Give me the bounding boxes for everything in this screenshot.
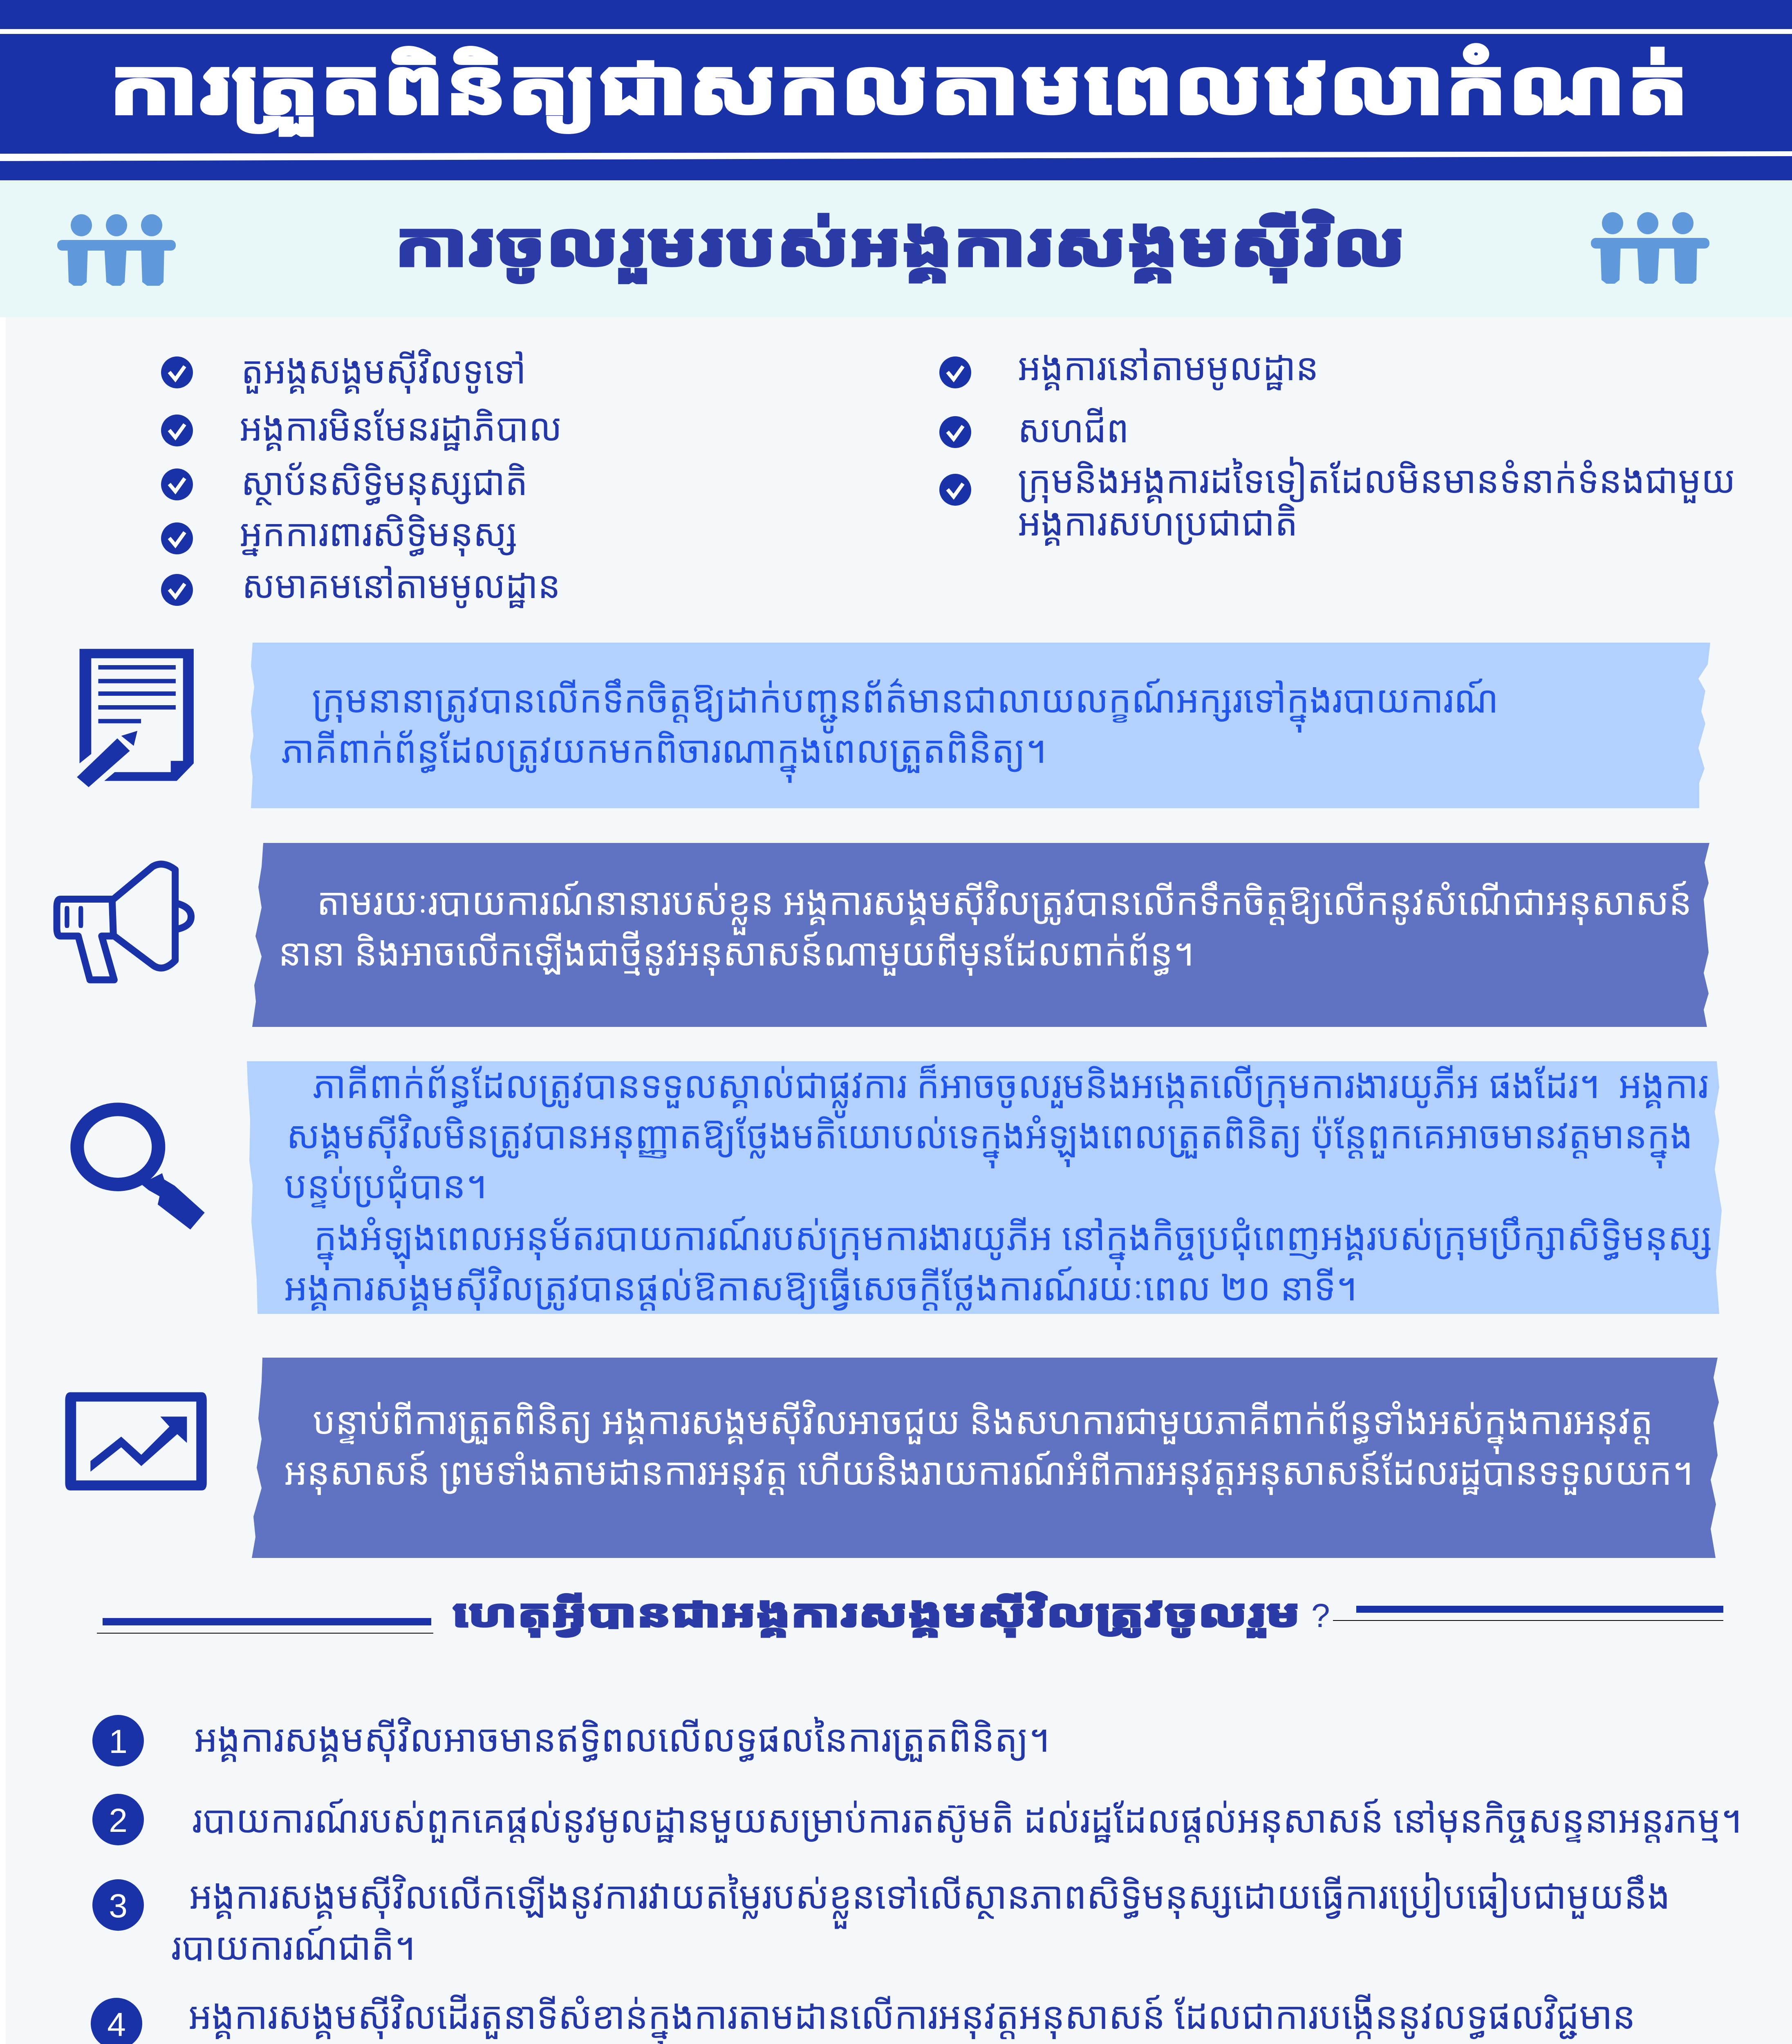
- text: ភាគីពាក់ព័ន្ធដែលត្រូវយកមកពិចារណាក្នុងពេលត្រួតពិនិត្យ។: [281, 723, 1046, 782]
- item: សមាគមនៅតាមមូលដ្ឋាន: [242, 558, 560, 609]
- item: [939, 402, 1129, 453]
- item: តួអង្គសង្គមស៊ីវិលទូទៅ: [241, 343, 526, 394]
- panel: after review: [252, 1358, 1719, 1558]
- item: សហជីព: [1018, 402, 1129, 453]
- item: ក្រុមនិងអង្គការដទៃទៀតដែលមិនមានទំនាក់ទំនងជាមួយ: [1018, 453, 1736, 504]
- subtitle band: [0, 180, 1792, 317]
- text: បន្ទប់ប្រជុំបាន។: [284, 1158, 487, 1209]
- text: សង្គមស៊ីវិលមិនត្រូវបានអនុញ្ញាតឱ្យថ្លែងមតិយោបល់ទេក្នុងអំឡុងពេលត្រួតពិនិត្យ ប៉ុន្តែពួកគេអាចមានវត្តមានក្នុង: [287, 1108, 1693, 1168]
- heading: why participate: ហេតុអ្វីបានជាអង្គការសង្គមស៊ីវិលត្រូវចូលរួម: [452, 1587, 1300, 1638]
- reason 4: 4: [107, 2006, 126, 2043]
- panel: written submissions: [250, 643, 1710, 808]
- text: នានា និងអាចលើកឡើងជាថ្មីនូវអនុសាសន៍ណាមួយពីមុនដែលពាក់ព័ន្ធ។: [278, 926, 1194, 977]
- reason 2: របាយការណ៍របស់ពួកគេផ្តល់នូវមូលដ្ឋានមួយសម្រាប់ការតស៊ូមតិ ដល់រដ្ឋដែលផ្តល់អនុសាសន៍ នៅមុនកិច្ចសន្ទនាអន្តរកម្ម។: [192, 1793, 1742, 1844]
- icon: people left: [57, 214, 176, 286]
- header banner: [0, 0, 1792, 180]
- panel: recommendations: [252, 843, 1709, 1027]
- icon: document with pencil: [77, 649, 194, 787]
- text: អនុសាសន៍ ព្រមទាំងតាមដានការអនុវត្ត ហើយនិងរាយការណ៍អំពីការអនុវត្តអនុសាសន៍ដែលរដ្ឋបានទទួលយក។: [284, 1445, 1693, 1496]
- reason 2: 2: [109, 1802, 128, 1839]
- subtitle: ការចូលរួមរបស់អង្គការសង្គមស៊ីវិល: [394, 202, 1406, 284]
- reason 3: របាយការណ៍ជាតិ។: [171, 1920, 415, 1971]
- item: អង្គការសហប្រជាជាតិ: [1018, 495, 1298, 547]
- reason 1: អង្គការសង្គមស៊ីវិលអាចមានឥទ្ធិពលលើលទ្ធផលនៃការត្រួតពិនិត្យ។: [194, 1712, 1050, 1763]
- icon: megaphone: [57, 864, 191, 980]
- checklist left: [161, 343, 562, 609]
- checklist right: [939, 340, 1736, 547]
- item: ស្ថាប័នសិទ្ធិមនុស្សជាតិ: [241, 455, 528, 506]
- panel: observing working group: [247, 1058, 1722, 1314]
- text: ភាគីពាក់ព័ន្ធដែលត្រូវបានទទួលស្គាល់ជាផ្លូវការ ក៏អាចចូលរួមនិងអង្កេតលើក្រុមការងារយូភីអ ផងដែរ។ អង្គការ: [313, 1058, 1709, 1118]
- icon: trend chart: [65, 1392, 207, 1490]
- text: ក្រុមនានាត្រូវបានលើកទឹកចិត្តឱ្យដាក់បញ្ជូនព័ត៌មានជាលាយលក្ខណ៍អក្សរទៅក្នុងរបាយការណ៍: [312, 672, 1499, 733]
- text: អង្គការសង្គមស៊ីវិលត្រូវបានផ្តល់ឱកាសឱ្យធ្វើសេចក្តីថ្លែងការណ៍រយៈពេល ២០ នាទី។: [284, 1260, 1357, 1311]
- item: អង្គការមិនមែនរដ្ឋាភិបាល: [240, 401, 562, 452]
- reason 3: [92, 1869, 1670, 1971]
- text: ក្នុងអំឡុងពេលអនុម័តរបាយការណ៍របស់ក្រុមការងារយូភីអ នៅក្នុងកិច្ចប្រជុំពេញអង្គរបស់ក្រុមប្រឹក្សាសិទ្ធិមនុស្ស: [314, 1210, 1712, 1270]
- reason 3: 3: [109, 1887, 128, 1925]
- text: តាមរយៈរបាយការណ៍នានារបស់ខ្លួន អង្គការសង្គមស៊ីវិលត្រូវបានលើកទឹកចិត្តឱ្យលើកនូវសំណើជាអនុសាសន៍: [317, 875, 1692, 935]
- title: ការត្រួតពិនិត្យជាសកលតាមពេលវេលាកំណត់: [109, 32, 1689, 137]
- icon: people right: [1591, 212, 1709, 284]
- item: [939, 453, 1736, 547]
- reason 3: អង្គការសង្គមស៊ីវិលលើកឡើងនូវការវាយតម្លៃរបស់ខ្លួនទៅលើស្ថានភាពសិទ្ធិមនុស្សដោយធ្វើការប្រៀបធៀបជាមួយនឹង: [189, 1869, 1670, 1929]
- item: អ្នកការពារសិទ្ធិមនុស្ស: [240, 506, 517, 557]
- icon: magnifier: [77, 1109, 205, 1230]
- reason 4: អង្គការសង្គមស៊ីវិលដើរតួនាទីសំខាន់ក្នុងការតាមដានលើការអនុវត្តអនុសាសន៍ ដែលជាការបង្កើននូវលទ្ធផលវិជ្ជមាន: [188, 1989, 1635, 2044]
- heading: why participate: ?: [1311, 1597, 1330, 1634]
- text: បន្ទាប់ពីការត្រួតពិនិត្យ អង្គការសង្គមស៊ីវិលអាចជួយ និងសហការជាមួយភាគីពាក់ព័ន្ធទាំងអស់ក្នុងការអនុវត្ត: [313, 1394, 1653, 1454]
- item: អង្គការនៅតាមមូលដ្ឋាន: [1018, 340, 1319, 391]
- heading: why participate: [97, 1587, 1723, 1638]
- reason 1: 1: [109, 1723, 128, 1760]
